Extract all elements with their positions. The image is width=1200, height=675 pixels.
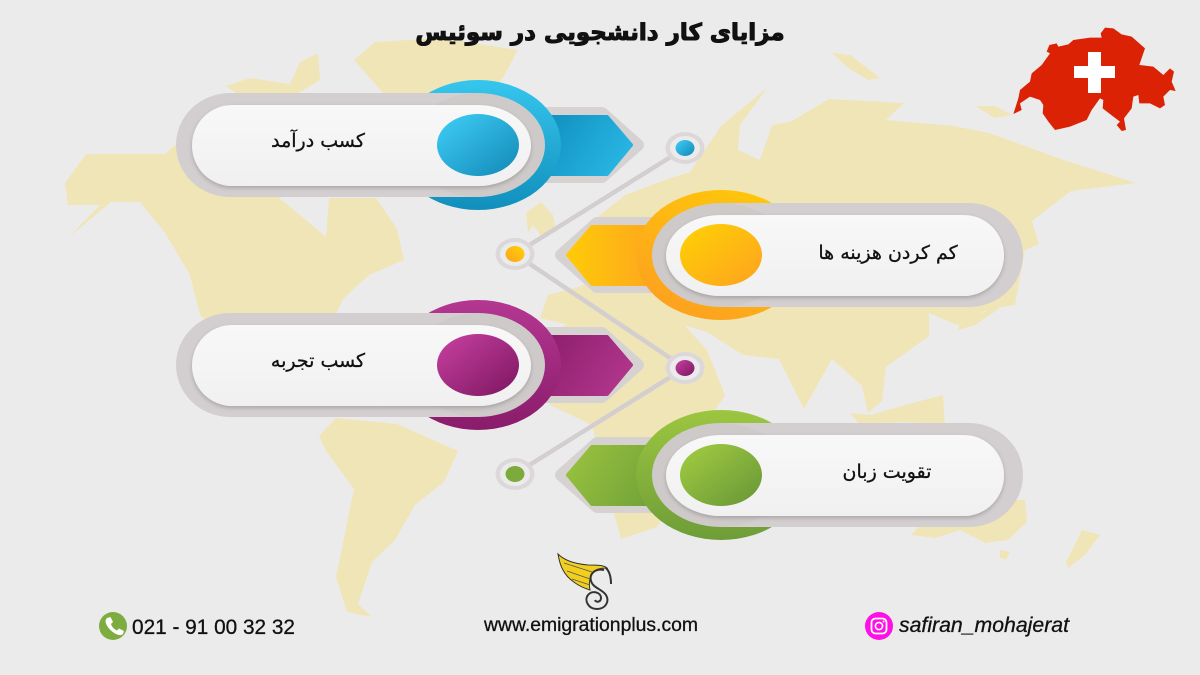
arctic islands [226,53,320,98]
australia [911,500,1027,543]
indonesia [850,395,945,425]
instagram contact [865,612,1070,640]
north america [65,100,404,400]
label: reduce costs: کم کردن هزینه ها [818,242,959,264]
phone contact [99,612,295,640]
africa [540,305,725,539]
connector lines [515,148,685,474]
node: purple [666,352,704,384]
japan [958,306,1000,330]
logo: winged S [558,554,611,609]
card: reduce costs [561,190,1023,320]
card: income [176,80,638,210]
card: language [561,410,1023,540]
new zealand [1066,530,1100,568]
label: income: کسب درآمد [271,128,366,152]
label: experience: کسب تجربه [271,350,366,372]
british isles [526,202,556,236]
eurasia [540,87,1136,413]
south america [319,418,458,617]
instagram contact: safiran_mohajerat [899,614,1070,637]
siberian islands [975,106,1012,118]
phone contact: 021 - 91 00 32 32 [132,616,295,639]
node: green [496,458,534,490]
website url: www.emigrationplus.com [483,615,698,636]
title: مزایای کار دانشجویی در سوئیس [415,20,785,46]
tasmania [1000,550,1010,560]
node: yellow [496,238,534,270]
card: experience [176,300,638,430]
icon: phone [99,612,127,640]
node: blue [666,132,704,164]
world map [65,38,1136,617]
icon: switzerland map with cross [1013,28,1176,131]
label: language: تقویت زبان [843,461,931,483]
icon: instagram [865,612,893,640]
greenland [354,38,518,130]
novaya zemlya [832,53,880,80]
